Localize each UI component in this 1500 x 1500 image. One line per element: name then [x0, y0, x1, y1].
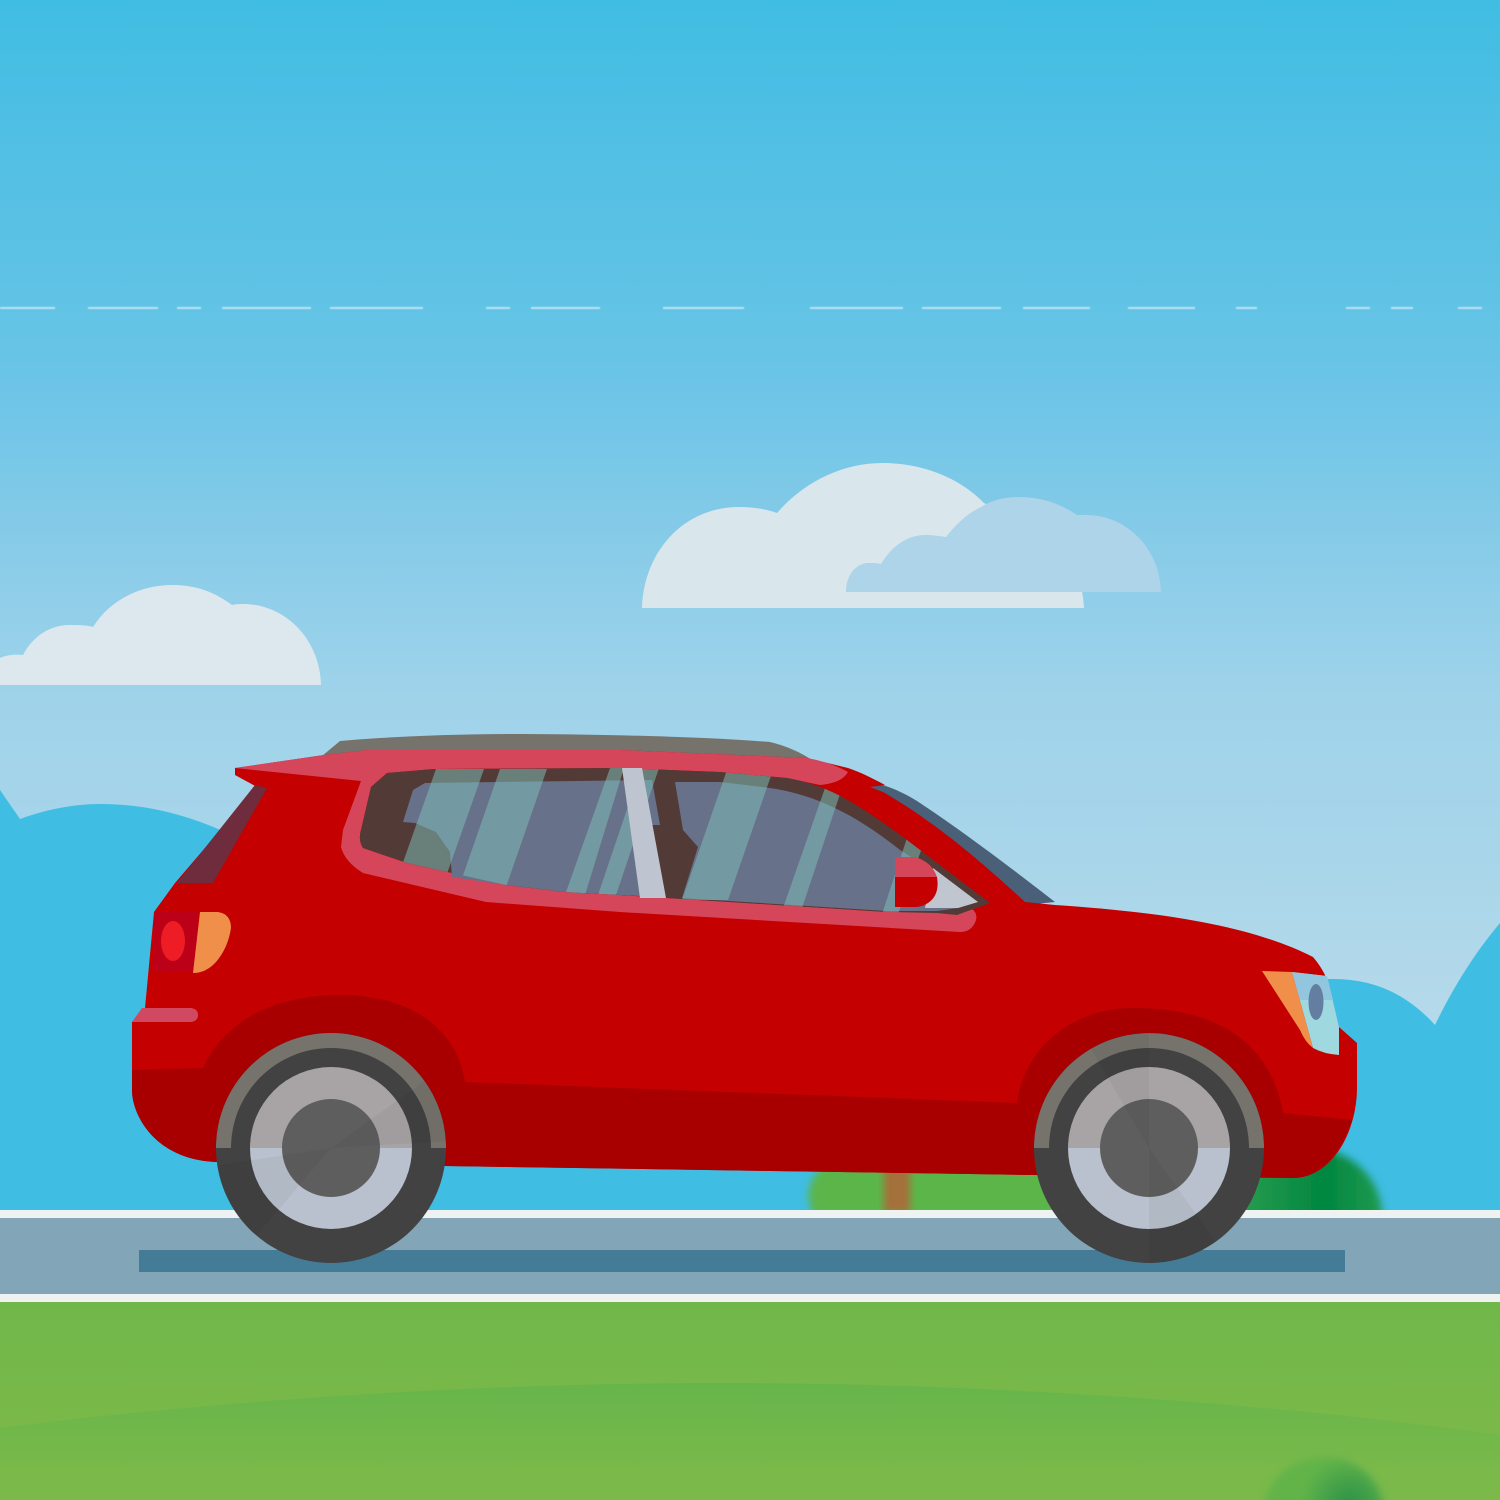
- headlight: [1262, 971, 1339, 1055]
- cloud: large white: [642, 463, 1084, 608]
- hills: right: [1300, 923, 1500, 1215]
- front side glass: [675, 782, 978, 911]
- rear bumper reflector: [132, 1008, 198, 1022]
- roof rack: [322, 734, 815, 762]
- car body: [132, 750, 1357, 1178]
- hills: left: [0, 790, 225, 1215]
- tail light: [154, 912, 231, 973]
- windshield outer: [868, 785, 1055, 905]
- body lower dark band: [132, 995, 1352, 1178]
- bush: dark green behind front wheel: [1238, 1148, 1382, 1282]
- tree trunk: [884, 1165, 910, 1213]
- side mirror: [895, 857, 938, 907]
- rear wheel: [216, 1033, 446, 1263]
- small blurred tree on grass: [1264, 1457, 1384, 1500]
- B pillar: [622, 768, 666, 898]
- cloud: left white: [0, 585, 321, 685]
- side window frame: [360, 768, 990, 915]
- tree: blurred green behind car: [808, 1160, 1060, 1215]
- front quarter glass: [925, 868, 978, 908]
- pink window trim: [235, 750, 976, 932]
- dashed white line in sky: [0, 307, 1482, 309]
- cloud: light blue overlapping: [846, 497, 1161, 592]
- road: [0, 1218, 1500, 1294]
- window reflections: [395, 768, 922, 914]
- hills: middle behind car: [224, 1000, 1301, 1215]
- car shadow: [139, 1250, 1345, 1272]
- grass hill: [0, 1383, 1500, 1500]
- road top edge: [0, 1210, 1500, 1218]
- car: [132, 734, 1357, 1270]
- grass: [0, 1302, 1500, 1500]
- rear window dark: [177, 785, 267, 883]
- road bottom edge: [0, 1294, 1500, 1302]
- rear side glass: [403, 780, 660, 896]
- front wheel: [1034, 1030, 1264, 1270]
